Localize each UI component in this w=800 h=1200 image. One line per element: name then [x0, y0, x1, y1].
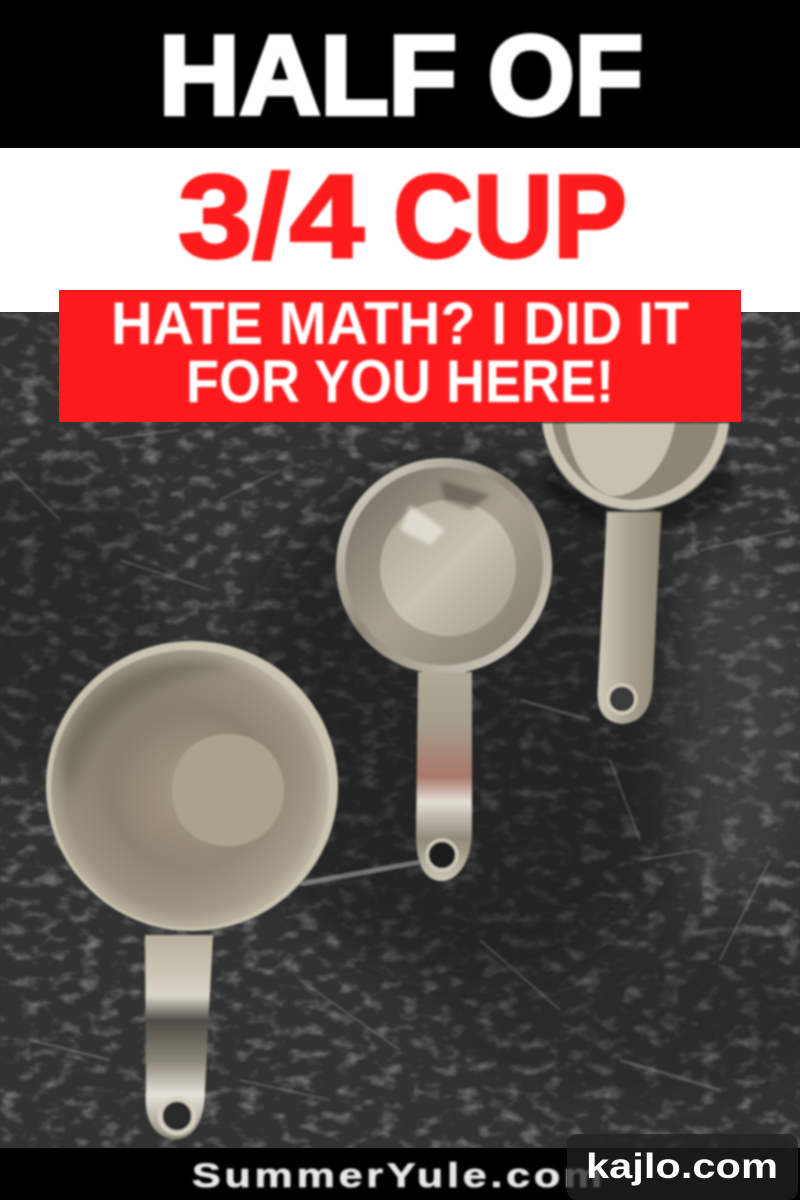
title: 3/4 CUP: CUP	[393, 151, 627, 283]
callout line 2: FOR YOU HERE!	[186, 348, 614, 415]
red callout box	[59, 290, 741, 422]
measuring cup: middle	[336, 458, 552, 881]
measuring cup: bottom left	[46, 641, 338, 1139]
white banner	[0, 148, 800, 312]
measuring cup: top right	[542, 423, 735, 724]
watermark: kajlo.com	[567, 1134, 798, 1200]
top black banner	[0, 0, 800, 148]
photo background: dark slate surface	[0, 312, 800, 1148]
slate scratches	[10, 430, 790, 1100]
footer: SummerYule.com: SummerYule.com	[192, 1157, 606, 1195]
title: 3/4 CUP	[178, 151, 627, 283]
bottom black banner	[0, 1148, 800, 1200]
title: 3/4 CUP: 3/4	[178, 151, 364, 283]
title: HALF OF: HALF OF	[159, 13, 643, 138]
callout line 1: HATE MATH? I DID IT	[111, 290, 689, 357]
watermark: kajlo.com: kajlo.com	[586, 1147, 778, 1186]
